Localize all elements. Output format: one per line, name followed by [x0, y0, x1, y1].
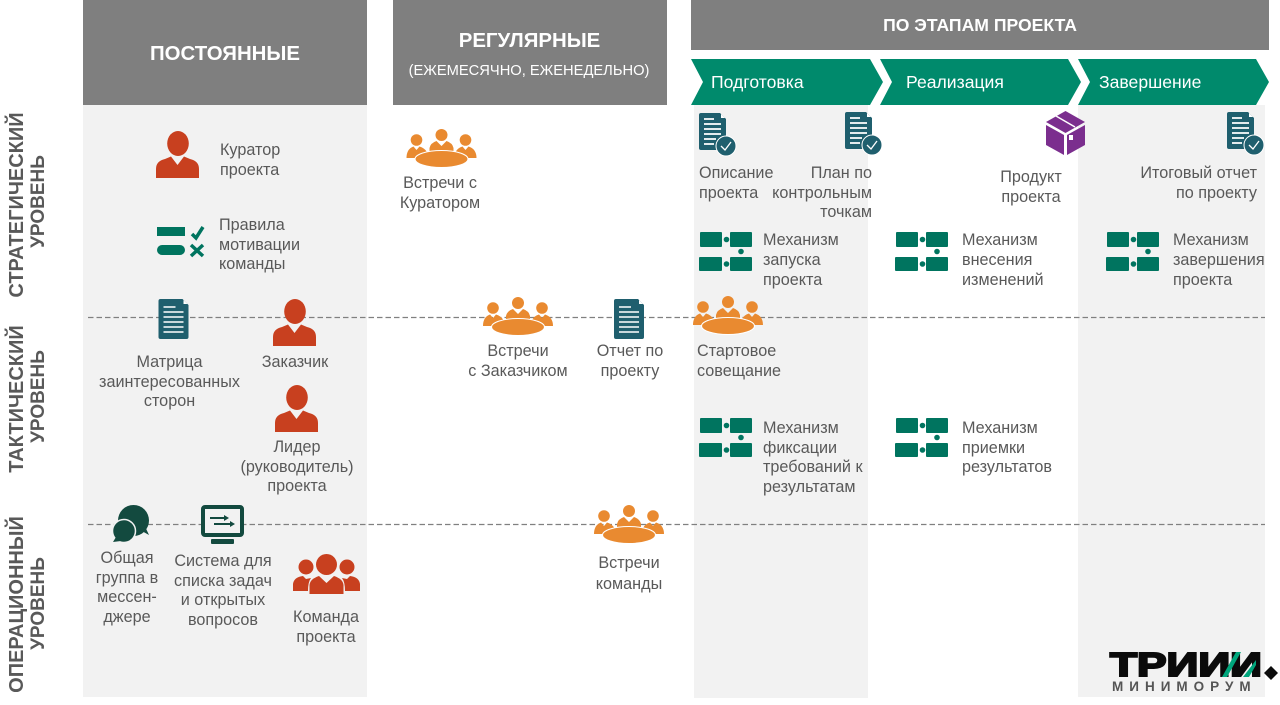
item: final report: [1140, 112, 1264, 202]
item: acceptance mechanism: приемки: [962, 439, 1025, 457]
heading: regular: [393, 0, 667, 105]
item: change mechanism: [895, 231, 1044, 289]
item: stakeholder matrix: [99, 299, 240, 410]
item: project leader: (руководитель): [240, 458, 354, 476]
item: milestone plan: [772, 112, 882, 221]
item: task tracking system: вопросов: [188, 611, 258, 629]
item: curator meetings: Встречи с: [403, 174, 477, 192]
heading: regular: (ЕЖЕМЕСЯЧНО, ЕЖЕНЕДЕЛЬНО): [409, 63, 649, 79]
level label: tactical: [4, 325, 49, 473]
level label: operational: [4, 516, 49, 693]
item: change mechanism: Механизм: [962, 231, 1038, 249]
item: project report: Отчет по: [597, 342, 663, 360]
item: acceptance mechanism: [895, 418, 1052, 476]
item: task tracking system: Система для: [174, 552, 272, 570]
item: team motivation rules: команды: [219, 255, 285, 273]
item: team motivation rules: мотивации: [219, 236, 300, 254]
item: change mechanism: изменений: [962, 271, 1044, 289]
item: kickoff meeting: Стартовое: [697, 342, 776, 360]
item: stakeholder matrix: заинтересованных: [99, 373, 240, 391]
level label: strategic: УРОВЕНЬ: [28, 155, 49, 248]
stage arrow: completion: Завершение: [1099, 72, 1201, 92]
item: task tracking system: списка задач: [174, 572, 272, 590]
level label: operational: ОПЕРАЦИОННЫЙ: [4, 516, 28, 693]
item: project team: проекта: [296, 628, 356, 646]
item: curator meetings: [400, 129, 480, 212]
item: project report: проекту: [601, 362, 660, 380]
stage arrow: completion: [1078, 59, 1269, 105]
heading: by project stages: [691, 0, 1269, 50]
item: project curator: [156, 131, 280, 179]
item: project team: [293, 554, 360, 646]
item: curator meetings: Куратором: [400, 194, 480, 212]
item: team meetings: [594, 505, 664, 593]
item: project product: Продукт: [1000, 168, 1062, 186]
stage arrow: preparation: [691, 59, 883, 105]
item: customer meetings: [468, 297, 568, 380]
item: project curator: проекта: [220, 161, 279, 179]
stage arrow: implementation: Реализация: [906, 72, 1004, 92]
item: team meetings: Встречи: [598, 554, 660, 572]
item: task tracking system: и открытых: [181, 591, 265, 609]
item: project leader: [240, 385, 354, 495]
heading: constant: ПОСТОЯННЫЕ: [150, 43, 300, 65]
item: requirements mechanism: требований к: [763, 458, 863, 476]
item: project leader: проекта: [267, 477, 327, 495]
item: messenger group: Общая: [101, 549, 153, 567]
heading: by project stages: ПО ЭТАПАМ ПРОЕКТА: [883, 15, 1077, 35]
item: completion mechanism: [1106, 231, 1265, 289]
item: customer: [262, 299, 329, 371]
item: acceptance mechanism: результатов: [962, 458, 1052, 476]
item: milestone plan: точкам: [820, 203, 872, 221]
item: customer meetings: Встречи: [487, 342, 549, 360]
level label: tactical: ТАКТИЧЕСКИЙ: [4, 325, 28, 473]
item: project report: [597, 299, 663, 380]
level label: strategic: СТРАТЕГИЧЕСКИЙ: [4, 112, 28, 298]
stage arrow: preparation: Подготовка: [711, 72, 804, 92]
item: change mechanism: внесения: [962, 251, 1032, 269]
item: project product: проекта: [1001, 188, 1061, 206]
item: acceptance mechanism: Механизм: [962, 419, 1038, 437]
level label: operational: УРОВЕНЬ: [28, 557, 49, 650]
item: launch mechanism: запуска: [763, 251, 821, 269]
item: project curator: Куратор: [220, 141, 280, 159]
item: messenger group: джере: [103, 608, 151, 626]
logo: Trim Minimorum: ТРИИИ: [1110, 646, 1262, 683]
item: completion mechanism: завершения: [1173, 251, 1265, 269]
item: project description: проекта: [699, 184, 758, 202]
item: stakeholder matrix: Матрица: [136, 353, 203, 371]
item: team motivation rules: Правила: [219, 216, 285, 234]
item: requirements mechanism: результатам: [763, 478, 855, 496]
item: team motivation rules: [157, 216, 300, 273]
item: completion mechanism: проекта: [1173, 271, 1232, 289]
item: completion mechanism: Механизм: [1173, 231, 1249, 249]
item: final report: Итоговый отчет: [1140, 164, 1258, 182]
item: task tracking system: [174, 507, 272, 629]
item: project leader: Лидер: [273, 438, 321, 456]
heading: regular: РЕГУЛЯРНЫЕ: [459, 30, 600, 52]
level label: tactical: УРОВЕНЬ: [28, 350, 49, 443]
item: requirements mechanism: фиксации: [763, 439, 837, 457]
item: customer meetings: с Заказчиком: [468, 362, 568, 380]
item: project product: [1000, 111, 1085, 206]
item: project description: Описание: [699, 164, 773, 182]
item: team meetings: команды: [596, 575, 662, 593]
item: messenger group: группа в: [96, 569, 158, 587]
stage arrow: implementation: [880, 59, 1081, 105]
item: kickoff meeting: [693, 296, 781, 380]
item: launch mechanism: проекта: [763, 271, 822, 289]
item: requirements mechanism: [699, 418, 863, 496]
item: stakeholder matrix: сторон: [144, 392, 195, 410]
logo: Trim Minimorum: МИНИМОРУМ: [1112, 679, 1257, 694]
item: requirements mechanism: Механизм: [763, 419, 839, 437]
item: launch mechanism: Механизм: [763, 231, 839, 249]
item: milestone plan: контрольным: [772, 184, 872, 202]
item: messenger group: мессен-: [97, 588, 157, 606]
logo: Trim Minimorum: [1110, 646, 1278, 694]
item: project team: Команда: [293, 608, 359, 626]
item: customer: Заказчик: [262, 353, 329, 371]
item: milestone plan: План по: [811, 164, 872, 182]
item: project description: [699, 113, 773, 202]
item: launch mechanism: [699, 231, 839, 289]
heading: constant: [83, 0, 367, 105]
item: kickoff meeting: совещание: [697, 362, 781, 380]
level label: strategic: [4, 112, 49, 298]
panel: background columns: [83, 105, 1265, 698]
item: final report: по проекту: [1176, 184, 1258, 202]
item: messenger group: [96, 505, 158, 626]
